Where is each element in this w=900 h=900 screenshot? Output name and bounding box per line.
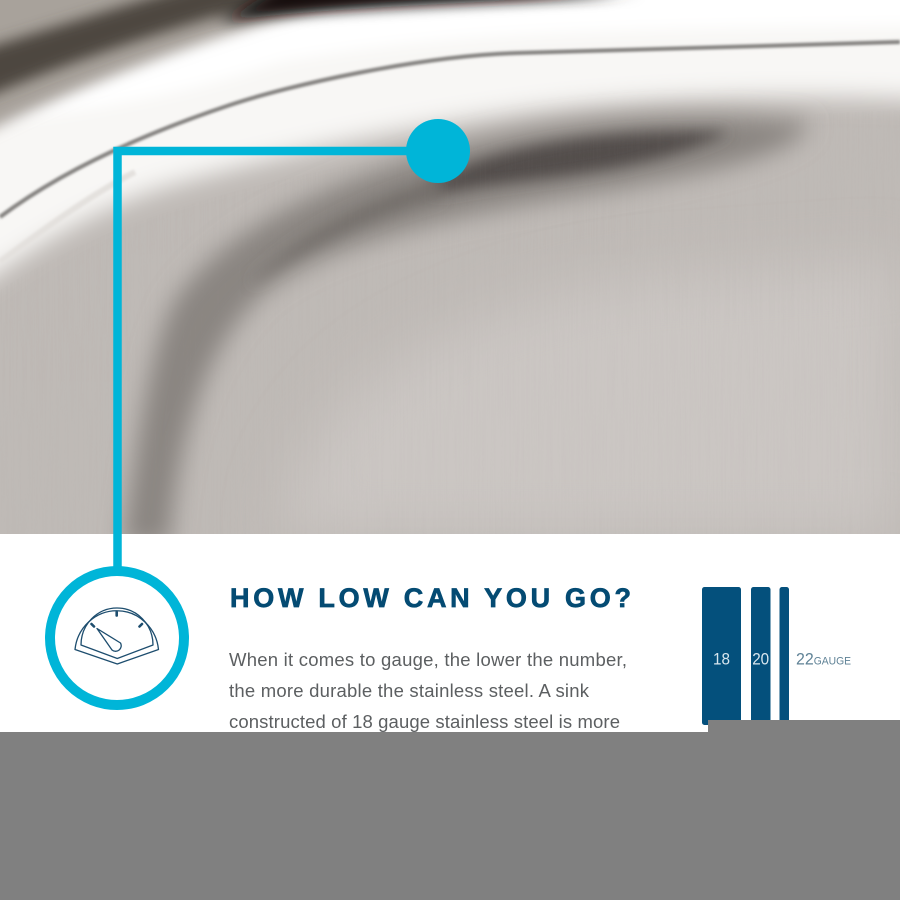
bar: 20 gauge: 20 <box>752 650 769 668</box>
grey redaction block <box>0 720 900 900</box>
white content panel <box>0 534 900 734</box>
icon: gauge in circle <box>50 571 184 705</box>
gauge thickness chart <box>702 587 851 725</box>
stainless steel photo background <box>0 0 900 545</box>
bar: 20 gauge <box>751 587 770 725</box>
body text: When it comes to gauge, the lower the number, <box>229 649 627 670</box>
connector end dot <box>406 119 470 183</box>
bar: 18 gauge <box>702 587 741 725</box>
heading: HOW LOW CAN YOU GO? <box>230 583 631 613</box>
body text: constructed of 18 gauge stainless steel is more <box>229 711 620 732</box>
body text: the more durable the stainless steel. A sink <box>229 680 590 701</box>
connector line <box>118 151 437 572</box>
body text <box>229 649 627 732</box>
label: 22 gauge: 22GAUGE <box>796 650 851 668</box>
bar: 22 gauge <box>780 587 789 725</box>
bar: 18 gauge: 18 <box>713 650 730 668</box>
